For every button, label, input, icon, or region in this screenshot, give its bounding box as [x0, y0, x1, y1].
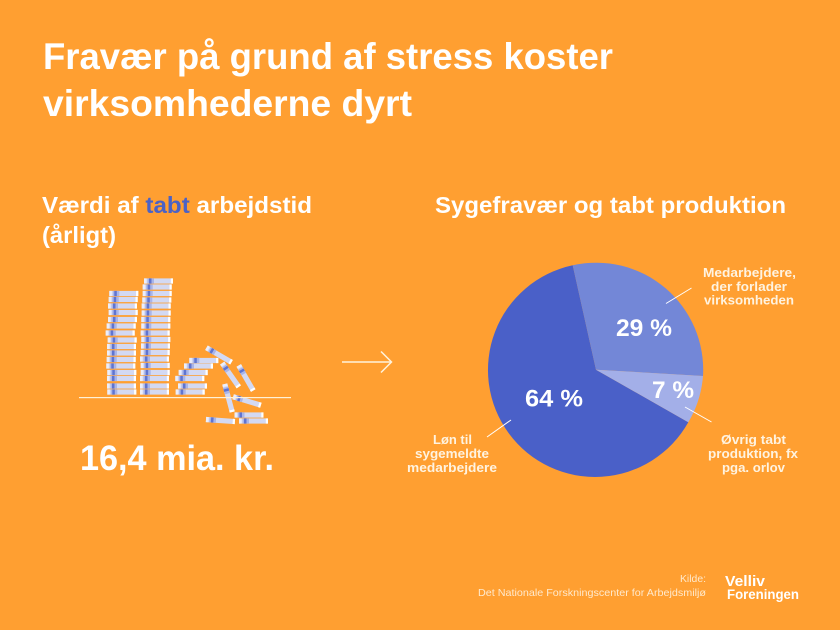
source [478, 573, 707, 599]
logo: Velliv Foreningen: Foreningen [727, 586, 799, 602]
slice: 29 percent [573, 263, 703, 376]
source: Kilde: [680, 573, 706, 585]
title: virksomhederne dyrt [43, 83, 412, 124]
value: 64 percent: 64 % [525, 386, 583, 412]
label: other lost production: Øvrig tabt [721, 432, 787, 447]
label: employees leaving [703, 265, 796, 308]
heading: value of lost working time: (årligt) [42, 222, 116, 248]
slice: 64 percent [488, 265, 688, 477]
label: other lost production: pga. orlov [722, 460, 786, 475]
collapsing stack of notes [175, 358, 218, 395]
arrow [342, 352, 392, 372]
label: salary to sick employees [407, 432, 497, 475]
falling notes [205, 345, 268, 424]
left stack of notes [106, 291, 138, 395]
logo: Velliv Foreningen: Velliv [725, 573, 766, 590]
logo: Velliv Foreningen [725, 573, 799, 602]
label: employees leaving: virksomheden [704, 292, 794, 308]
source: Det Nationale Forskningscenter for Arbejdsmiljø [478, 587, 707, 599]
pie chart [488, 263, 703, 477]
label: other lost production [708, 432, 799, 475]
total amount: 16,4 mia. kr. [80, 439, 274, 478]
heading: sick leave and lost production: Sygefravær og tabt produktion [435, 192, 786, 218]
label: salary to sick employees: Løn til [433, 432, 472, 447]
title: Fravær på grund af stress koster [43, 36, 613, 77]
label: other lost production: produktion, fx [708, 446, 799, 461]
illustration: falling stacks of banknotes [79, 278, 291, 424]
label: salary to sick employees: medarbejdere [407, 460, 497, 475]
leader lines [487, 288, 712, 437]
label: salary to sick employees: sygemeldte [415, 446, 489, 461]
value: 29 percent: 29 % [616, 315, 672, 342]
label: employees leaving: Medarbejdere, [703, 265, 796, 280]
heading: value of lost working time: Værdi af tabt arbejdstid [42, 192, 312, 218]
middle stack of notes [140, 278, 173, 395]
slice: 7 percent [596, 370, 703, 422]
value: 7 percent: 7 % [652, 377, 694, 404]
heading: value of lost working time [42, 192, 312, 248]
title [43, 36, 613, 124]
label: employees leaving: der forlader [711, 279, 787, 294]
ground line [79, 397, 291, 398]
